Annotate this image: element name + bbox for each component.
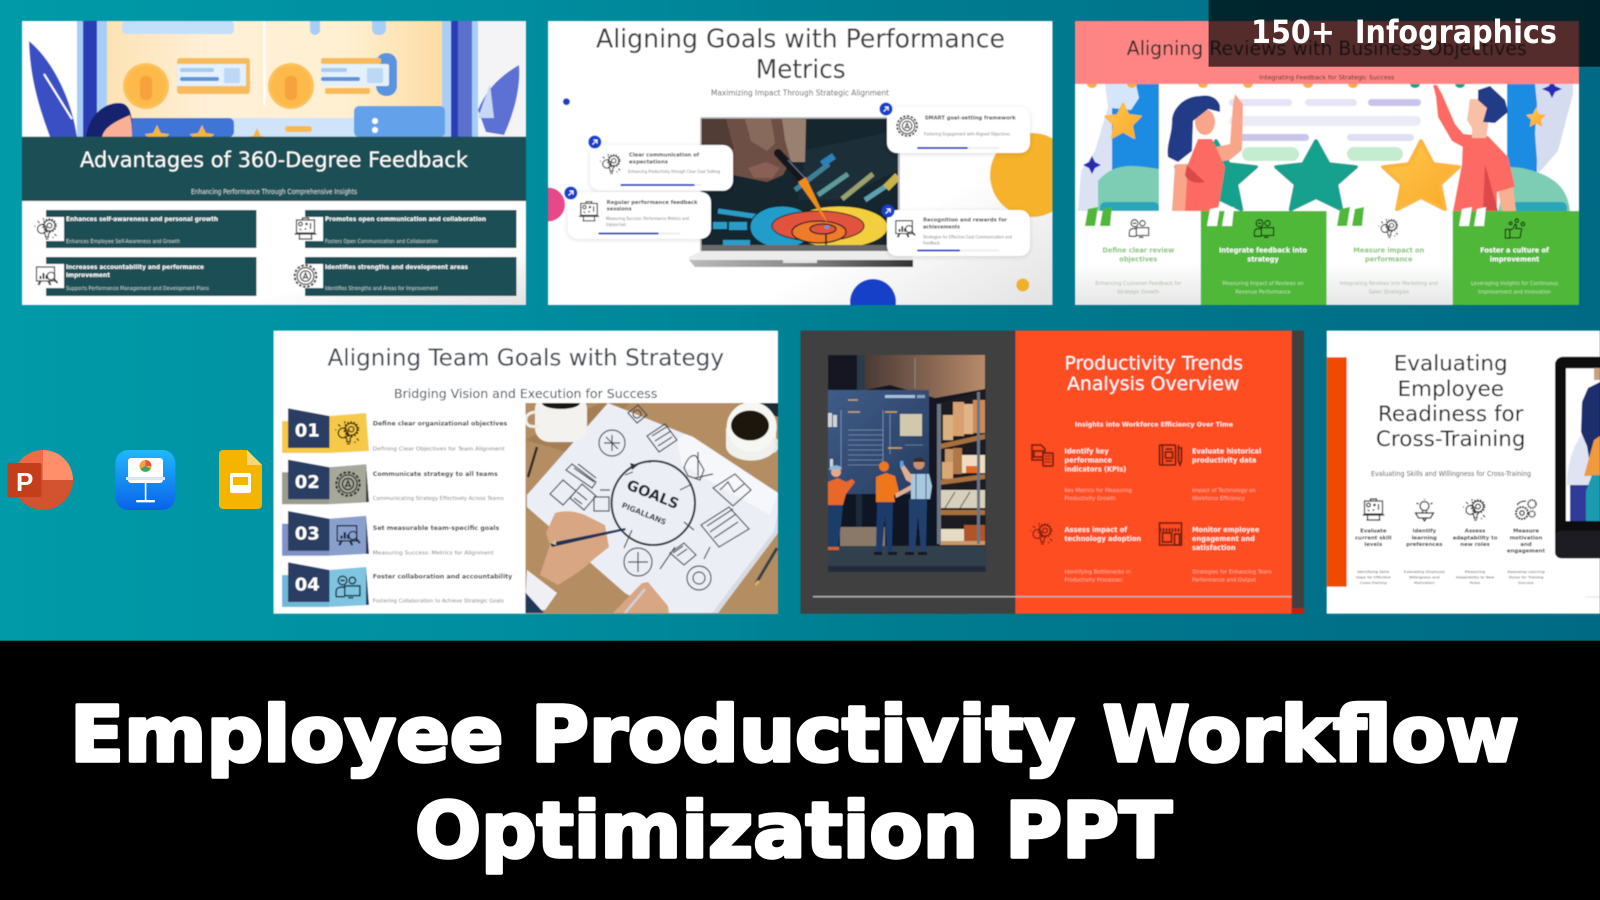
column: motivation: Styles for Training	[1509, 575, 1544, 580]
step 03: Measuring Success: Metrics for Alignment	[373, 550, 495, 556]
icon: Google Slides	[219, 450, 262, 509]
column: Foster culture: improvement	[1490, 256, 1539, 264]
card: Recognition	[882, 204, 1030, 256]
column: adaptability: adaptability to	[1453, 535, 1498, 541]
icon: chart board	[896, 221, 915, 237]
column: adaptability: Assess	[1465, 528, 1485, 534]
item: accountability: improvement	[66, 271, 110, 279]
item: strengths	[295, 257, 516, 296]
card: Recognition: Recognition and rewards for	[923, 218, 1007, 224]
column: current skill: current skill	[1355, 535, 1392, 541]
item: technology adoption: technology adoption	[1064, 535, 1141, 543]
title	[1064, 352, 1243, 395]
badge: 150+ Infographics	[1209, 0, 1600, 67]
photo: goals sketch on desk	[525, 395, 778, 614]
column: Foster culture: Leveraging Insights for Continuous	[1471, 281, 1559, 287]
step 03: Set measurable team-specific goals	[373, 524, 499, 532]
badge	[882, 204, 894, 218]
column: current skill: Cross-Training	[1360, 580, 1387, 585]
column: current skill: Identifying Skills	[1357, 569, 1389, 574]
item: self-awareness	[34, 210, 256, 248]
quote mark	[1337, 207, 1364, 226]
title	[596, 25, 1005, 85]
item: open communication: Fosters Open Communication and Collaboration	[325, 239, 438, 245]
subtitle: Insights into Workforce Efficiency Over Time	[1075, 421, 1234, 429]
column: Measure impact: Integrating Reviews into Marketing and	[1340, 281, 1438, 287]
title: Readiness for	[1378, 402, 1524, 427]
column: adaptability	[1453, 499, 1498, 585]
item: KPIs: Productivity Growth	[1064, 496, 1116, 502]
icon: PowerPoint	[8, 450, 73, 510]
column: adaptability: Roles	[1470, 580, 1480, 585]
column: Integrate feedback: Integrate feedback into	[1219, 246, 1307, 254]
step 02: 02	[295, 472, 320, 493]
icon: bulb gear	[34, 218, 56, 239]
main title: Employee Productivity Workflow	[70, 691, 1519, 780]
slide: Aligning Team Goals with Strategy	[274, 331, 778, 614]
badge: 150+ Infographics: 150+ Infographics	[1251, 13, 1557, 51]
title: Productivity Trends	[1064, 352, 1243, 374]
subtitle: Bridging Vision and Execution for Success	[394, 387, 658, 402]
card: Clear communication: Enhancing Productivity through Clear Goal Setting	[628, 169, 720, 174]
photo: goals sketch on desk: GOALS	[624, 478, 681, 513]
badge	[880, 102, 892, 116]
footer band	[0, 641, 1600, 900]
step 02	[282, 460, 504, 504]
item: historical data: Evaluate historical	[1192, 447, 1261, 455]
column: learning preferences: Motivation	[1414, 580, 1435, 585]
item: historical data: productivity data	[1192, 456, 1256, 464]
column: adaptability: Measuring	[1465, 569, 1486, 574]
item: technology adoption: Identifying Bottlenecks in	[1064, 569, 1131, 575]
column: Integrate feedback: strategy	[1247, 256, 1279, 264]
card: Clear communication: Clear communication of	[629, 153, 700, 159]
column: motivation: Measure	[1513, 528, 1539, 534]
header band	[1075, 21, 1579, 84]
column: Foster culture: Foster a culture of	[1480, 246, 1549, 254]
column: motivation: Success	[1518, 580, 1534, 585]
item: engagement: Strategies for Enhancing Team	[1192, 569, 1271, 575]
item: historical data: Impact of Technology on	[1192, 488, 1255, 494]
column: Measure impact: performance	[1365, 256, 1413, 264]
icon: documents	[1032, 445, 1053, 466]
title: Evaluating	[1394, 352, 1508, 377]
item: accountability: Increases accountability and performance	[66, 263, 205, 271]
item: KPIs: indicators (KPIs)	[1064, 465, 1126, 473]
slide: Advantages of 360-Degree Feedback	[22, 15, 526, 305]
item: self-awareness: Enhances Employee Self-Awareness and Growth	[66, 239, 180, 245]
orange accent	[1327, 357, 1347, 587]
step 04: Foster collaboration and accountability	[373, 573, 513, 581]
card: Regular feedback: Measuring Success: Performance Metrics and	[606, 216, 689, 221]
subtitle: Integrating Feedback for Strategic Success	[1259, 73, 1395, 81]
icon: bulb gear	[600, 154, 620, 173]
item: engagement	[1160, 523, 1271, 583]
column: Define review objectives: Strategic Growth	[1117, 289, 1159, 295]
step 04	[282, 562, 513, 607]
icon: bulb gear	[1378, 219, 1398, 237]
main title: Optimization PPT	[415, 787, 1172, 876]
icon: storefront	[1160, 523, 1182, 545]
icon: board	[579, 202, 599, 221]
badge	[588, 136, 601, 148]
step 04: 04	[295, 575, 320, 596]
item: engagement: Monitor employee	[1192, 526, 1260, 534]
column: learning preferences: Willingness and	[1409, 575, 1440, 580]
step 02: Communicate strategy to all teams	[373, 470, 498, 478]
icon: notebook	[1160, 445, 1182, 465]
corner accent	[1292, 608, 1304, 614]
card: SMART goals: Fostering Engagement with Aligned Objectives	[924, 132, 1010, 137]
icon: bulb gear	[1463, 499, 1485, 520]
photo: warehouse team	[828, 355, 986, 572]
quote mark	[1085, 207, 1112, 226]
item: accountability	[36, 257, 256, 296]
column: current skill: Evaluate	[1360, 528, 1387, 534]
column: motivation: motivation	[1510, 535, 1543, 541]
column: current skill	[1355, 499, 1392, 585]
item: KPIs: performance	[1064, 456, 1113, 464]
icon: gear	[295, 265, 316, 287]
icon: planning board	[294, 218, 316, 239]
column: adaptability: Adaptability to New	[1456, 575, 1495, 580]
column: motivation	[1507, 500, 1546, 585]
item: technology adoption: Productivity Processes	[1064, 577, 1123, 583]
item: KPIs: Identify key	[1064, 447, 1109, 455]
icon: chart board	[36, 267, 58, 285]
card: Recognition: achievements	[923, 224, 961, 230]
icon: Keynote	[115, 450, 175, 510]
slide: Aligning Reviews with Business Objectives	[1075, 21, 1579, 305]
subtitle: Maximizing Impact Through Strategic Alignment	[711, 89, 889, 98]
title: Employee	[1397, 377, 1504, 402]
monitor with presenter	[1555, 357, 1600, 558]
lower monitor stand hint	[1585, 596, 1600, 598]
decorative circles	[547, 98, 1054, 306]
slide: Aligning Goals with Performance Metrics	[547, 20, 1054, 306]
column: current skill: Gaps for Effective	[1356, 575, 1391, 580]
step 03: 03	[295, 523, 320, 544]
column: learning preferences	[1404, 499, 1445, 585]
column: Define review objectives	[1075, 207, 1201, 305]
column: Define review objectives: Enhancing Customer Feedback for	[1095, 281, 1182, 287]
laptop with target photo	[689, 117, 913, 267]
icon: gear	[336, 472, 360, 496]
icon: bulb gear	[1030, 523, 1052, 544]
step 04: Fostering Collaboration to Achieve Strategic Goals	[373, 599, 504, 605]
icon: people	[336, 576, 360, 598]
item: accountability: Supports Performance Management and Development Plans	[66, 286, 209, 292]
divider line	[813, 596, 1292, 597]
quote mark	[1459, 207, 1486, 226]
quote mark	[1207, 207, 1234, 226]
icon: bulb gear	[335, 421, 359, 444]
icon: lamp	[1416, 499, 1434, 521]
icon: gears	[1516, 500, 1536, 519]
photo: goals sketch on desk: PIGALLANS	[620, 501, 668, 527]
card: Clear communication: expectations	[629, 160, 669, 166]
slide: Evaluating Employee Readiness for Cross-Training	[1327, 331, 1600, 614]
card: Regular feedback: Employee Goals	[606, 222, 626, 227]
icon: people	[1254, 220, 1274, 237]
item: engagement: Performance and Output	[1192, 577, 1256, 583]
column: Foster culture	[1453, 207, 1579, 305]
column: Integrate feedback	[1201, 207, 1327, 305]
item: technology adoption	[1030, 523, 1141, 583]
column: motivation: Assessing Learning	[1507, 569, 1545, 574]
icon: gear	[897, 116, 917, 136]
column: Measure impact: Sales Strategies	[1369, 289, 1409, 295]
column: motivation: and	[1520, 542, 1532, 548]
item: open communication	[294, 210, 516, 248]
column: Measure impact	[1327, 207, 1453, 305]
badge	[564, 186, 577, 200]
item: strengths: Identifies Strengths and Areas for Improvement	[325, 286, 438, 292]
subtitle: Enhancing Performance Through Comprehensive Insights	[191, 188, 357, 196]
icon: PowerPoint: P	[16, 467, 33, 497]
card: Recognition: Strategies for Effective Goal Communication and	[923, 234, 1012, 239]
title: Aligning Goals with Performance	[596, 25, 1005, 55]
step 01: Defining Clear Objectives for Team Alignment	[373, 447, 506, 453]
title: Cross-Training	[1376, 427, 1525, 452]
slide: Productivity Trends Analysis Overview	[800, 331, 1304, 614]
step 03	[282, 511, 499, 556]
icon: board	[1362, 499, 1384, 520]
column: Integrate feedback: Revenue Performance	[1235, 289, 1291, 295]
card: Clear communication	[588, 136, 733, 191]
icon: thumbs up	[1505, 219, 1525, 238]
step 01	[282, 408, 507, 453]
column: current skill: levels	[1364, 542, 1382, 548]
icon: people	[1129, 220, 1149, 237]
background gradient	[0, 0, 1600, 641]
item: KPIs	[1032, 445, 1132, 502]
step 02: Communicating Strategy Effectively Across Teams	[373, 496, 504, 502]
item: engagement: engagement and	[1192, 535, 1255, 543]
card: SMART goals	[880, 102, 1030, 153]
column: adaptability: new roles	[1460, 542, 1490, 548]
column: learning preferences: preferences	[1406, 542, 1442, 548]
item: strengths: Identifies strengths and development areas	[325, 263, 468, 271]
item: open communication: Promotes open communication and collaboration	[325, 215, 486, 223]
card: Regular feedback	[564, 186, 711, 239]
column: Define review objectives: Define clear review	[1102, 246, 1174, 254]
column: Measure impact: Measure impact on	[1353, 246, 1425, 254]
header band	[22, 137, 526, 201]
column: learning preferences: Evaluating Employee	[1404, 569, 1445, 574]
column: Integrate feedback: Measuring Impact of Reviews on	[1222, 281, 1304, 287]
column: learning preferences: Identify	[1412, 528, 1437, 534]
footer shading	[22, 201, 526, 305]
item: KPIs: Key Metrics for Measuring	[1064, 488, 1132, 494]
title	[1376, 352, 1525, 452]
step 01: Define clear organizational objectives	[373, 420, 507, 428]
step 01: 01	[295, 421, 320, 442]
card: Regular feedback: Regular performance feedback	[607, 200, 698, 206]
title: Aligning Reviews with Business Objectives	[1127, 37, 1527, 60]
item: historical data: Workforce Efficiency	[1192, 496, 1245, 502]
orange panel	[1016, 331, 1292, 614]
column: Foster culture: Improvement and Innovation	[1478, 289, 1551, 295]
title: Aligning Team Goals with Strategy	[328, 344, 724, 372]
item: technology adoption: Assess impact of	[1064, 526, 1127, 534]
icon: chart board	[337, 526, 360, 545]
item: self-awareness: Enhances self-awareness and personal growth	[66, 215, 218, 223]
card: SMART goals: SMART goal-setting framework	[925, 115, 1016, 121]
item: historical data	[1160, 445, 1261, 502]
column: motivation: engagement	[1507, 549, 1546, 555]
main title	[70, 691, 1519, 876]
illustration: feedback screen	[28, 20, 526, 138]
subtitle: Evaluating Skills and Willingness for Cross-Training	[1371, 470, 1531, 478]
item: engagement: satisfaction	[1192, 544, 1236, 552]
app icons	[8, 450, 262, 510]
card: Regular feedback: sessions	[607, 207, 632, 213]
title: Metrics	[756, 55, 846, 85]
title: Analysis Overview	[1067, 373, 1239, 395]
card: Recognition: Feedback	[923, 240, 941, 245]
illustration: people and stars	[1078, 80, 1573, 222]
column: learning preferences: learning	[1412, 535, 1437, 541]
title: Advantages of 360-Degree Feedback	[80, 148, 469, 173]
column: Define review objectives: objectives	[1119, 256, 1157, 264]
